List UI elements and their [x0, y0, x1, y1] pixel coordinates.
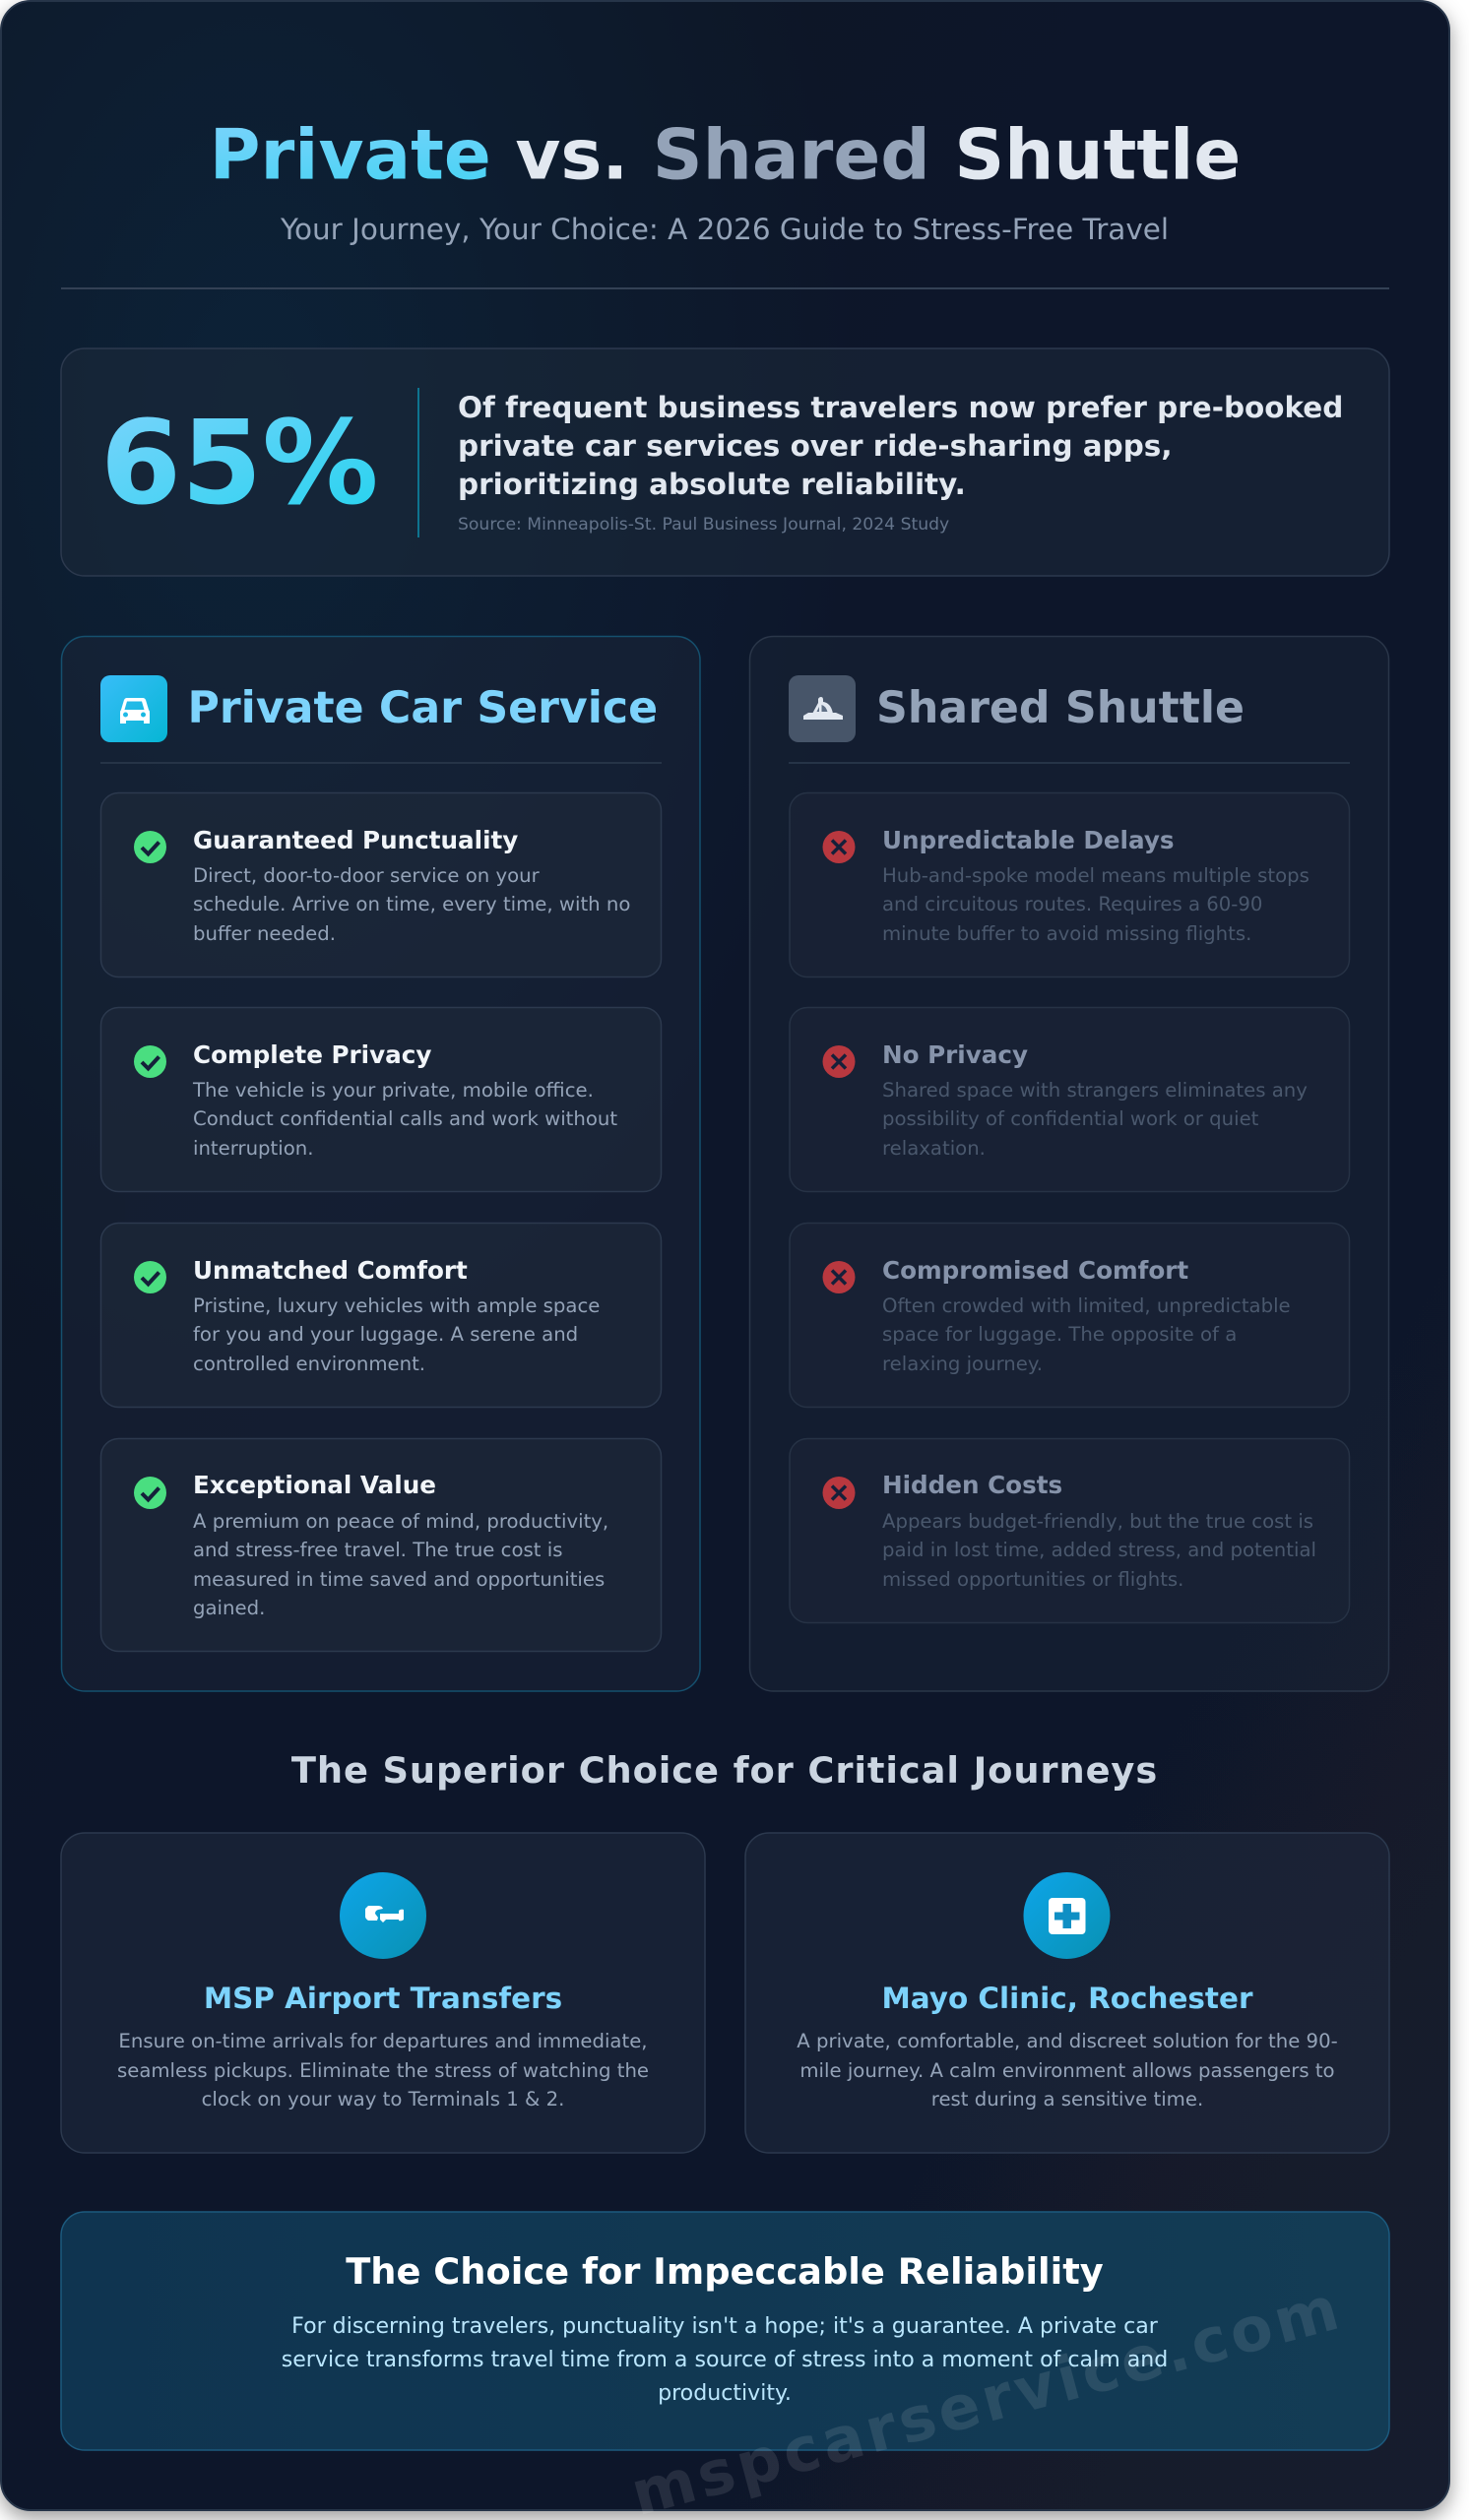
statistic description: Of frequent business travelers now prefer pre-booked [458, 391, 1343, 424]
drawback: hidden costs: paid in lost time, added stress, and potential [882, 1539, 1316, 1561]
benefit: complete privacy: The vehicle is your private, mobile office. [192, 1079, 594, 1102]
panel: call to action: service transforms travel time from a source of stress into a moment of calm and [282, 2348, 1168, 2372]
benefit: guaranteed punctuality [100, 793, 662, 976]
benefit: unmatched comfort: for you and your luggage. A serene and [193, 1323, 578, 1346]
panel: MSP airport transfers: seamless pickups. Eliminate the stress of watching the [117, 2059, 649, 2082]
drawback: no privacy: Shared space with strangers eliminates any [882, 1079, 1308, 1102]
section heading: The Superior Choice for Critical Journeys [291, 1749, 1158, 1792]
benefit: unmatched comfort: Pristine, luxury vehicles with ample space [193, 1294, 600, 1317]
drawback: no privacy: relaxation. [882, 1137, 986, 1160]
panel: key statistic [61, 348, 1389, 576]
panel: call to action: productivity. [658, 2381, 792, 2406]
benefit: exceptional value: and stress-free travel. The true cost is [193, 1539, 562, 1561]
drawback: no privacy: possibility of confidential work or quiet [882, 1107, 1259, 1130]
statistic description [458, 391, 1343, 501]
icon: check [134, 1261, 166, 1293]
benefit: unmatched comfort: Unmatched Comfort [193, 1256, 468, 1285]
drawback: compromised comfort: relaxing journey. [882, 1353, 1043, 1375]
panel: Mayo Clinic, Rochester: rest during a sensitive time. [931, 2088, 1203, 2110]
benefit: guaranteed punctuality: buffer needed. [193, 922, 336, 945]
panel: call to action: For discerning travelers, punctuality isn't a hope; it's a guarantee. A private car [291, 2314, 1159, 2339]
icon: check [134, 831, 166, 863]
panel: Mayo Clinic, Rochester [745, 1833, 1389, 2153]
title: Private vs. Shared Shuttle [210, 114, 1241, 195]
drawback: hidden costs [790, 1439, 1349, 1622]
icon: check [134, 1045, 166, 1078]
panel: MSP airport transfers: clock on your way to Terminals 1 & 2. [202, 2088, 564, 2110]
benefit: complete privacy: Conduct confidential calls and work without [193, 1107, 617, 1130]
drawback: compromised comfort: Compromised Comfort [882, 1256, 1188, 1285]
statistic description: prioritizing absolute reliability. [458, 468, 966, 501]
drawback: unpredictable delays: Hub-and-spoke model means multiple stops [882, 864, 1309, 887]
panel: MSP airport transfers [61, 1833, 705, 2153]
drawback: unpredictable delays: and circuitous routes. Requires a 60-90 [882, 893, 1262, 915]
drawback: unpredictable delays: minute buffer to avoid missing flights. [882, 922, 1251, 945]
drawback: hidden costs: missed opportunities or flights. [882, 1568, 1183, 1591]
benefit: complete privacy [100, 1008, 662, 1191]
icon: cross [823, 1477, 855, 1509]
benefit: guaranteed punctuality: schedule. Arrive on time, every time, with no [193, 893, 630, 915]
benefit: exceptional value: measured in time saved and opportunities [193, 1568, 605, 1591]
statistic description: private car services over ride-sharing apps, [458, 429, 1173, 463]
panel: private car service [61, 636, 700, 1691]
benefit: exceptional value: A premium on peace of mind, productivity, [193, 1510, 608, 1533]
big number 65%: 65% [100, 395, 378, 531]
panel: Mayo Clinic, Rochester: mile journey. A calm environment allows passengers to [799, 2059, 1335, 2082]
benefit: exceptional value: Exceptional Value [193, 1471, 436, 1499]
drawback: hidden costs: Appears budget-friendly, but the true cost is [882, 1510, 1313, 1533]
icon: check [134, 1477, 166, 1509]
drawback: unpredictable delays: Unpredictable Delays [882, 826, 1175, 854]
panel: MSP airport transfers: MSP Airport Transfers [204, 1982, 562, 2015]
drawback: compromised comfort: space for luggage. The opposite of a [882, 1323, 1237, 1346]
drawback: compromised comfort [790, 1223, 1349, 1408]
panel: MSP airport transfers: Ensure on-time arrivals for departures and immediate, [118, 2030, 648, 2052]
icon: airport [340, 1872, 426, 1959]
icon: cross [823, 1261, 855, 1293]
benefit: exceptional value: gained. [193, 1597, 265, 1619]
heading: private car service: Private Car Service [187, 683, 658, 733]
panel: call to action [61, 2212, 1389, 2450]
icon: shuttle [789, 675, 856, 742]
benefit: complete privacy: Complete Privacy [193, 1040, 431, 1069]
benefit: guaranteed punctuality: Direct, door-to-door service on your [193, 864, 541, 887]
drawback: compromised comfort: Often crowded with limited, unpredictable [882, 1294, 1291, 1317]
subtitle: Your Journey, Your Choice: A 2026 Guide to Stress-Free Travel [280, 213, 1169, 246]
panel: shared shuttle [750, 636, 1388, 1691]
icon: cross [823, 831, 855, 863]
icon: cross [823, 1045, 855, 1078]
drawback: no privacy [790, 1008, 1349, 1191]
benefit: unmatched comfort: controlled environment. [193, 1353, 425, 1375]
panel: Mayo Clinic, Rochester: A private, comfortable, and discreet solution for the 90- [797, 2030, 1338, 2052]
drawback: no privacy: No Privacy [882, 1040, 1028, 1069]
statistic source: Source: Minneapolis-St. Paul Business Journal, 2024 Study [458, 515, 949, 535]
icon: car [100, 675, 167, 742]
heading: shared shuttle: Shared Shuttle [876, 683, 1245, 733]
benefit: complete privacy: interruption. [193, 1137, 313, 1160]
benefit: guaranteed punctuality: Guaranteed Punctuality [193, 826, 518, 854]
benefit: unmatched comfort [100, 1223, 662, 1408]
panel: call to action: The Choice for Impeccable Reliability [346, 2250, 1104, 2293]
benefit: exceptional value [100, 1439, 662, 1652]
icon: medical cross [1024, 1872, 1111, 1959]
drawback: unpredictable delays [790, 793, 1349, 976]
drawback: hidden costs: Hidden Costs [882, 1471, 1062, 1499]
panel: Mayo Clinic, Rochester: Mayo Clinic, Rochester [882, 1982, 1253, 2015]
